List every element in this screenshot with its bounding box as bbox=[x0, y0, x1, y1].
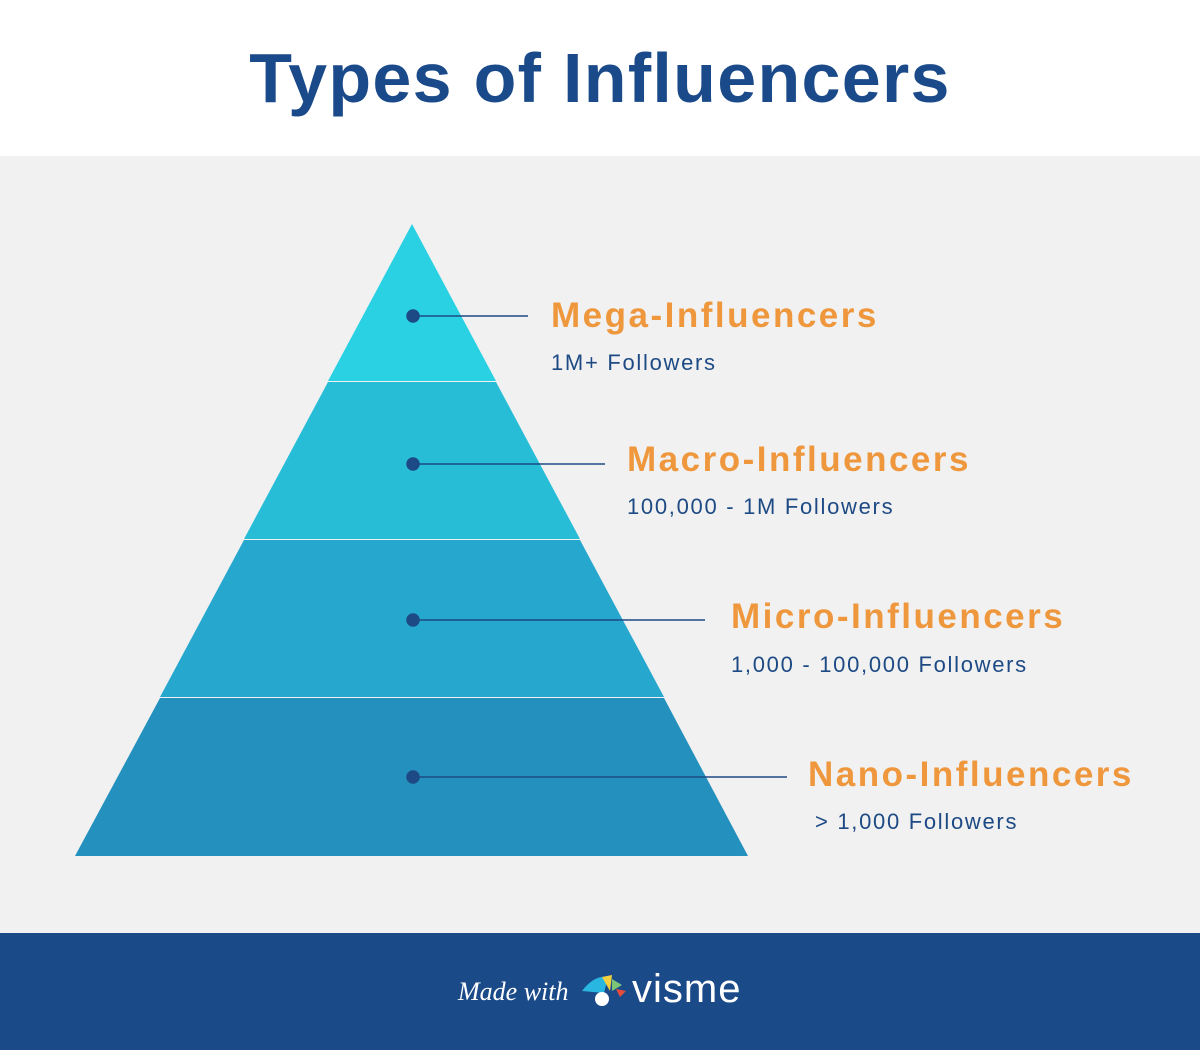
footer bbox=[0, 933, 1200, 1050]
label: mega: Mega-Influencers bbox=[551, 296, 879, 335]
sub: macro: 100,000 - 1M Followers bbox=[627, 494, 894, 519]
connector lines bbox=[407, 310, 787, 783]
footer text: Made with bbox=[458, 977, 568, 1006]
title: Types of Influencers bbox=[249, 39, 951, 117]
layer: micro bbox=[160, 540, 664, 697]
label: micro: Micro-Influencers bbox=[731, 597, 1065, 636]
sub: mega: 1M+ Followers bbox=[551, 350, 717, 375]
icon: visme logo bbox=[582, 975, 626, 1006]
sub: micro: 1,000 - 100,000 Followers bbox=[731, 652, 1028, 677]
layer: macro bbox=[244, 382, 580, 539]
label: macro: Macro-Influencers bbox=[627, 440, 971, 479]
label: nano: Nano-Influencers bbox=[808, 755, 1134, 794]
layer: nano bbox=[75, 698, 748, 856]
sub: nano: > 1,000 Followers bbox=[815, 809, 1018, 834]
layer: mega bbox=[328, 224, 496, 381]
logo text: visme bbox=[632, 967, 741, 1011]
